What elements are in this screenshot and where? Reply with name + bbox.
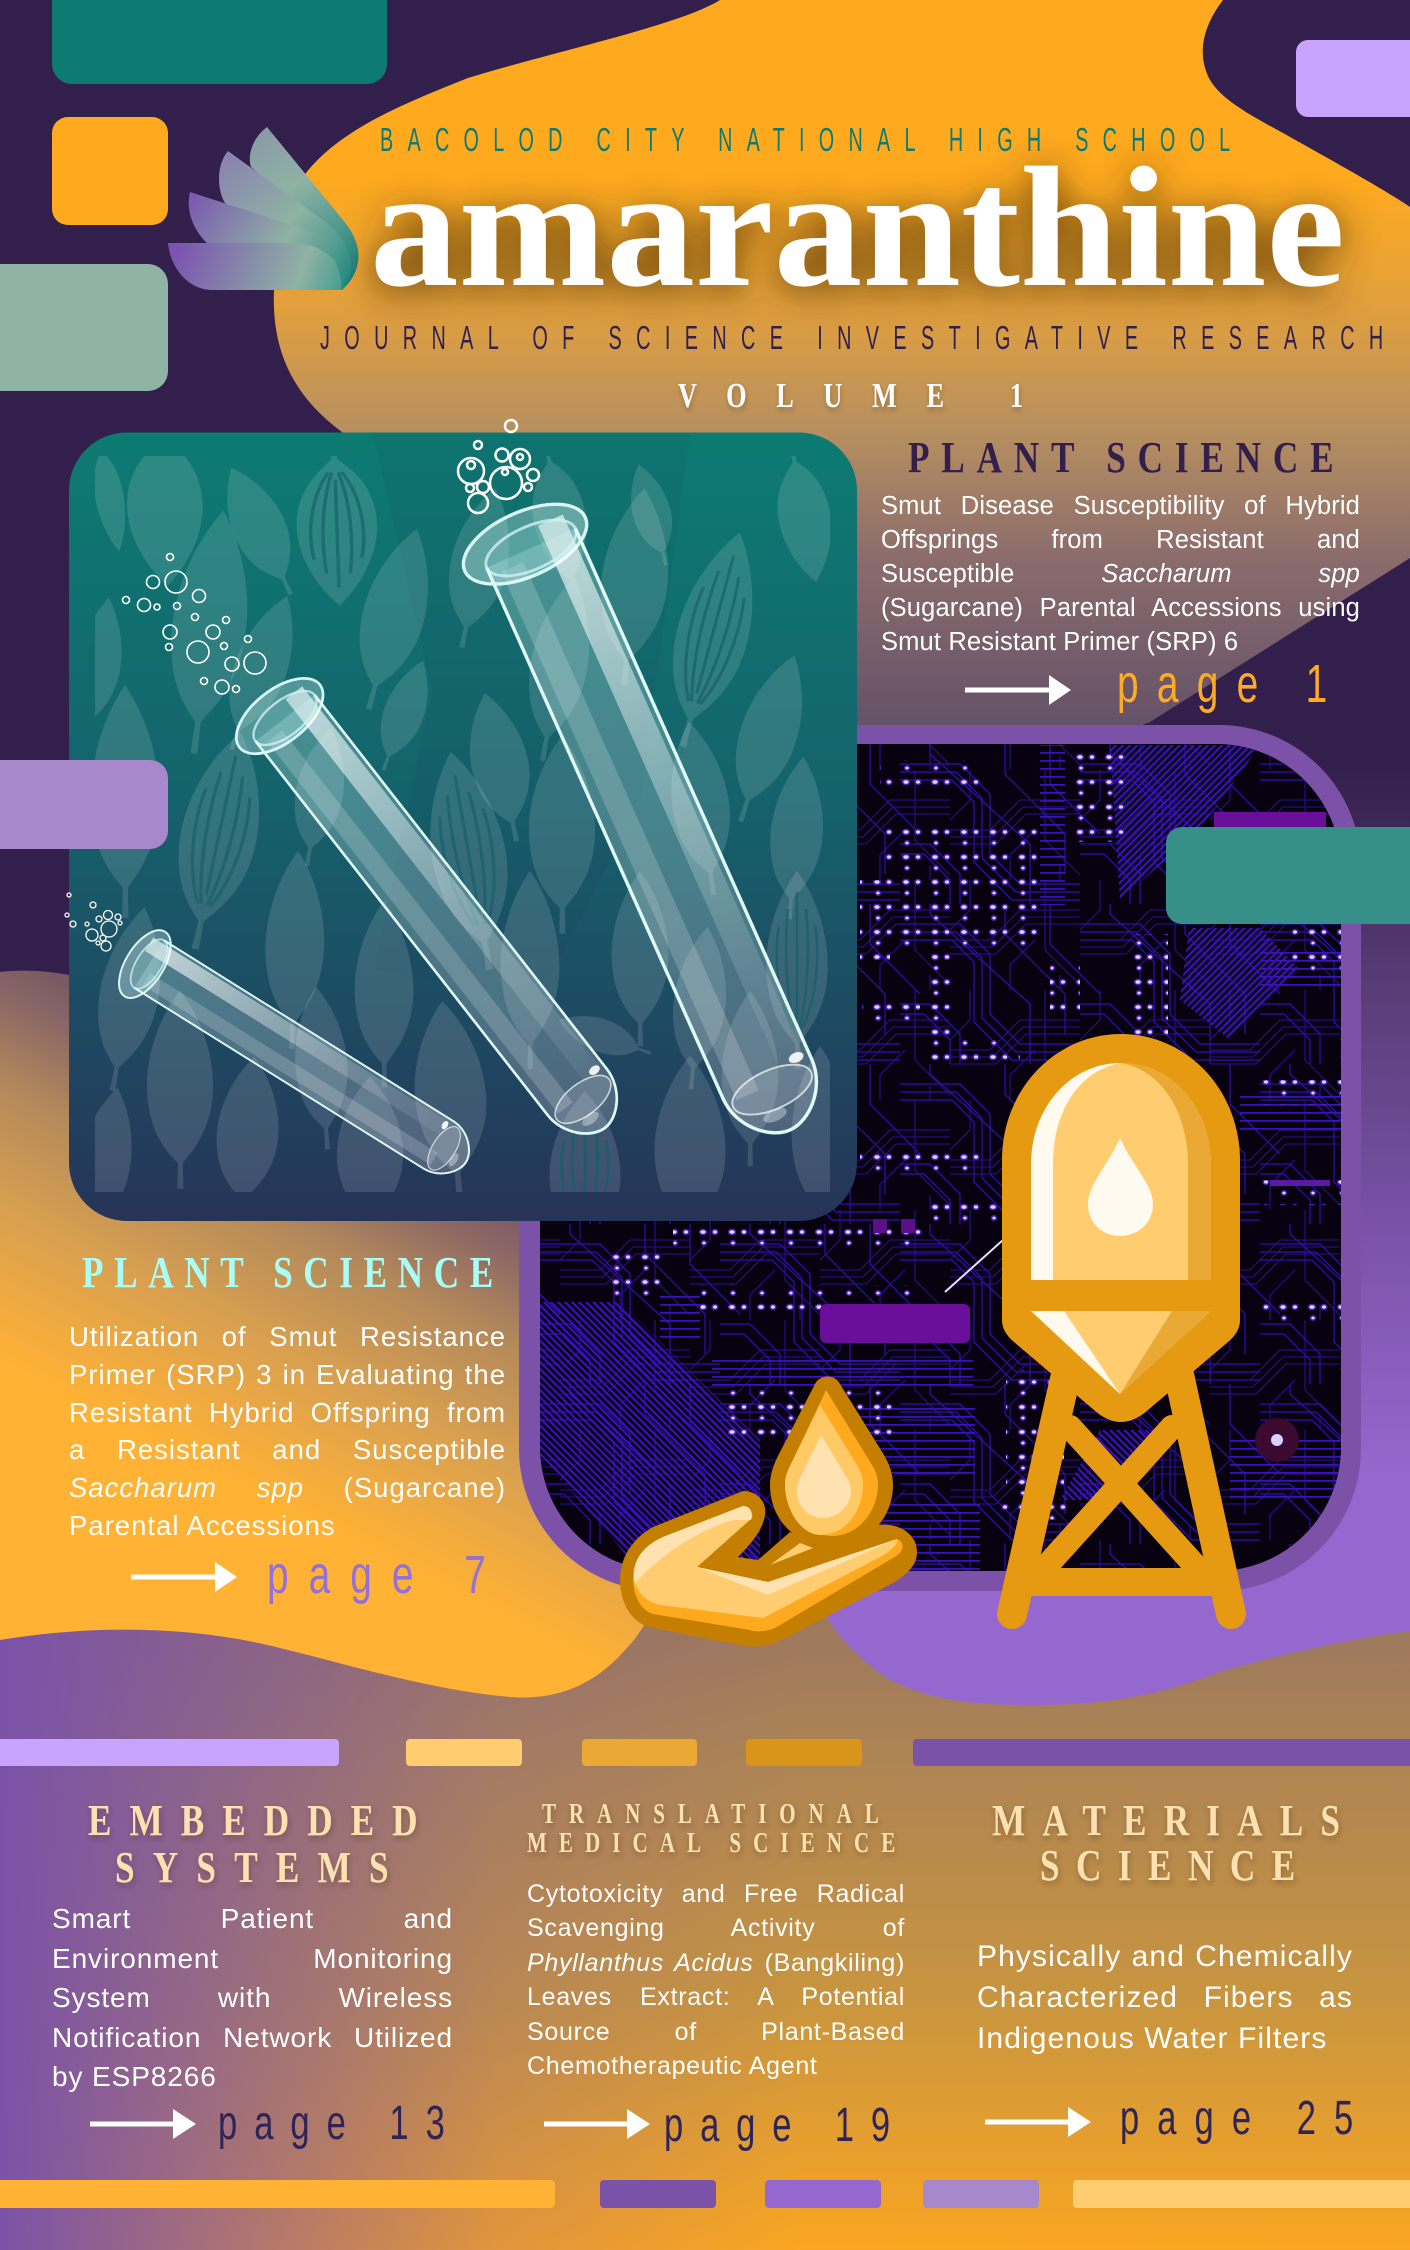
heading: plant science, left: PLANT SCIENCE xyxy=(82,1247,493,1297)
heading: translational medical science: TRANSLATIONAL xyxy=(542,1799,879,1830)
text block: smut disease article xyxy=(881,492,1360,656)
text block: translational medical article: Phyllanthus Acidus (Bangkiling) xyxy=(527,1949,905,1977)
text block: translational medical article: Scavenging Activity of xyxy=(527,1914,905,1942)
text block: translational medical article: Leaves Extract: A Potential xyxy=(527,1983,905,2011)
text: page 13: page 13 xyxy=(218,2095,445,2149)
icon: small test tube xyxy=(109,922,485,1196)
heading: embedded systems: SYSTEMS xyxy=(115,1842,389,1892)
arrow to page 25 xyxy=(985,2107,1091,2137)
arrow to page 7 xyxy=(131,1562,237,1592)
text block: embedded systems article: Environment Monitoring xyxy=(52,1942,453,1974)
heading: plant science, right: PLANT SCIENCE xyxy=(908,432,1334,482)
heading: translational medical science: MEDICAL SCIENCE xyxy=(527,1828,895,1859)
text block: embedded systems article xyxy=(52,1903,453,2092)
text: page 25: page 25 xyxy=(1120,2090,1353,2144)
text block: smut disease article: Smut Disease Susceptibility of Hybrid xyxy=(881,492,1360,520)
text block: embedded systems article: Smart Patient and xyxy=(52,1903,453,1934)
text block: smut resistance article xyxy=(69,1321,506,1541)
divider bars, upper row xyxy=(0,1739,1410,1766)
background: lower gradient band xyxy=(0,1500,1410,2250)
decorative teal block, right xyxy=(1166,827,1410,924)
panel: circuit board image with purple frame xyxy=(519,725,1361,1591)
text block: translational medical article xyxy=(527,1880,905,2080)
text block: materials science article xyxy=(977,1940,1353,2055)
text block: translational medical article: Chemotherapeutic Agent xyxy=(527,2052,818,2080)
text: page 7: page 7 xyxy=(267,1544,486,1604)
decorative rounded blocks, top left and top right xyxy=(0,0,1410,391)
text block: translational medical article: Source of Plant-Based xyxy=(527,2018,905,2046)
icon: hand holding a water drop xyxy=(620,1376,917,1647)
background: orange blob at lower left xyxy=(0,971,700,1697)
title: amaranthine: amaranthine xyxy=(370,133,1345,323)
text block: smut resistance article: Saccharum spp (Sugarcane) xyxy=(69,1472,506,1503)
text: school name: BACOLOD CITY NATIONAL HIGH SCHOOL xyxy=(380,121,1230,158)
icon: medium test tube xyxy=(223,664,643,1161)
heading: materials science: MATERIALS xyxy=(992,1795,1340,1845)
divider bars, lower row xyxy=(0,2180,1410,2208)
arrow to page 1 xyxy=(965,675,1071,705)
text block: smut disease article: Offsprings from Resistant and xyxy=(881,526,1360,554)
heading: materials science xyxy=(992,1795,1340,1890)
text block: smut resistance article: a Resistant and Susceptible xyxy=(69,1434,506,1465)
text block: embedded systems article: System with Wireless xyxy=(52,1982,453,2013)
text block: smut resistance article: Primer (SRP) 3 in Evaluating the xyxy=(69,1359,506,1390)
panel: test tubes over leaf pattern xyxy=(64,417,857,1266)
heading: translational medical science xyxy=(527,1799,895,1859)
text block: embedded systems article: Notification Network Utilized xyxy=(52,2022,453,2052)
arrow to page 19 xyxy=(544,2109,650,2139)
text block: translational medical article: Cytotoxicity and Free Radical xyxy=(527,1880,905,1908)
text: page 1: page 1 xyxy=(1117,653,1327,713)
background: orange blob at the top xyxy=(274,0,1410,900)
text block: materials science article: Characterized Fibers as xyxy=(977,1981,1353,2014)
icon: water tower xyxy=(1002,1034,1240,1614)
text block: smut resistance article: Parental Accessions xyxy=(69,1510,336,1541)
icon: logo feathers xyxy=(168,127,358,290)
icon: bubbles above medium tube xyxy=(122,554,266,694)
decorative lilac block, left xyxy=(0,760,168,849)
text: journal subtitle: JOURNAL OF SCIENCE INVESTIGATIVE RESEARCH xyxy=(320,319,1383,356)
text block: smut disease article: (Sugarcane) Parental Accessions using xyxy=(881,594,1360,622)
icon: bubbles above small tube xyxy=(65,893,122,951)
icon: large test tube xyxy=(452,488,847,1158)
background: purple blob on the right xyxy=(560,700,1410,1705)
text block: materials science article: Indigenous Water Filters xyxy=(977,2022,1327,2055)
text block: materials science article: Physically and Chemically xyxy=(977,1940,1353,1973)
text block: smut resistance article: Resistant Hybrid Offspring from xyxy=(69,1397,506,1428)
text: page 19: page 19 xyxy=(664,2097,890,2151)
text block: smut disease article: Smut Resistant Primer (SRP) 6 xyxy=(881,628,1238,656)
arrow to page 13 xyxy=(90,2109,196,2139)
heading: materials science: SCIENCE xyxy=(1040,1840,1295,1890)
leaf pattern xyxy=(64,417,848,1266)
text: volume: VOLUME 1 xyxy=(678,375,1023,415)
text block: smut disease article: Susceptible Saccharum spp xyxy=(881,560,1360,588)
text block: embedded systems article: by ESP8266 xyxy=(52,2061,217,2092)
icon: bubbles above large tube xyxy=(458,420,539,513)
heading: embedded systems xyxy=(88,1795,418,1892)
text block: smut resistance article: Utilization of Smut Resistance xyxy=(69,1321,506,1352)
heading: embedded systems: EMBEDDED xyxy=(88,1795,418,1845)
